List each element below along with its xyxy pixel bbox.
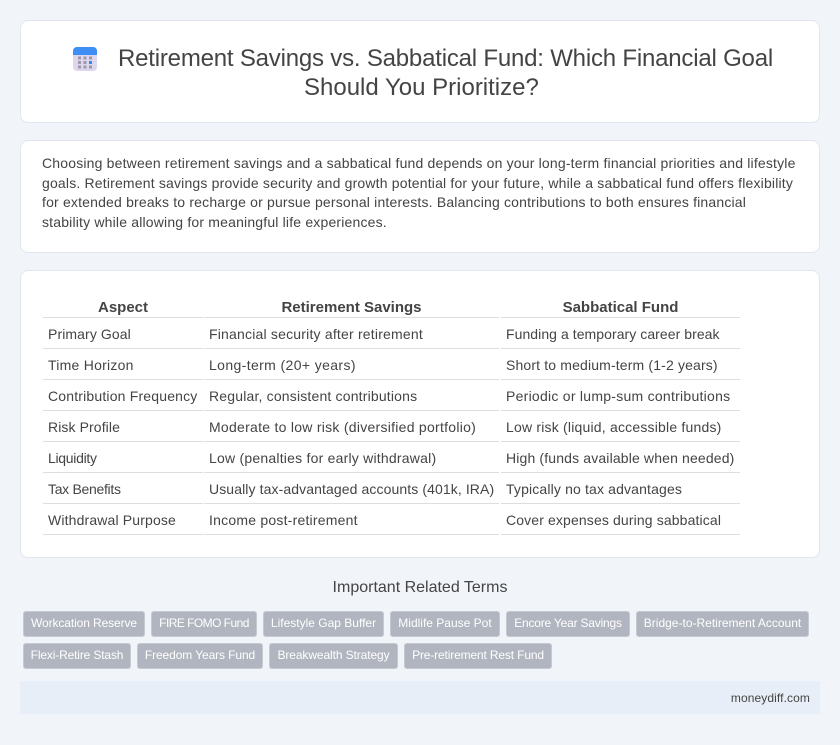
panel: introduction — [20, 140, 820, 253]
row: liquidity: High (funds available when needed) — [506, 450, 734, 466]
row: tax benefits — [43, 481, 740, 504]
tag: Encore Year Savings — [514, 616, 622, 630]
row: tax benefits: Tax Benefits — [48, 481, 121, 497]
tag: Flexi-Retire Stash — [31, 648, 123, 662]
related term tags — [23, 611, 809, 669]
tag — [23, 611, 145, 637]
tag — [263, 611, 384, 637]
row: tax benefits: Usually tax-advantaged accounts (401k, IRA) — [209, 481, 494, 497]
row: contribution frequency: Regular, consistent contributions — [209, 388, 417, 404]
table header — [43, 299, 740, 318]
row: primary goal — [43, 326, 740, 349]
row: liquidity — [43, 450, 740, 473]
tag: Pre-retirement Rest Fund — [412, 648, 544, 662]
tag: FIRE FOMO Fund — [159, 616, 249, 630]
row: risk profile: Risk Profile — [48, 419, 120, 435]
row: tax benefits: Typically no tax advantages — [506, 481, 682, 497]
row: primary goal: Financial security after retirement — [209, 326, 423, 342]
tag: Midlife Pause Pot — [398, 616, 492, 630]
row: withdrawal purpose: Withdrawal Purpose — [48, 512, 176, 528]
row: liquidity: Liquidity — [48, 450, 97, 466]
row: time horizon: Time Horizon — [48, 357, 134, 373]
tag — [390, 611, 500, 637]
tag — [506, 611, 630, 637]
panel: title header — [20, 20, 820, 123]
row: withdrawal purpose: Income post-retirement — [209, 512, 358, 528]
tag — [151, 611, 257, 637]
tag: Freedom Years Fund — [145, 648, 255, 662]
row: liquidity: Low (penalties for early withdrawal) — [209, 450, 436, 466]
tag — [269, 643, 398, 669]
table header: Retirement Savings — [281, 299, 422, 316]
row: primary goal: Primary Goal — [48, 326, 131, 342]
row: time horizon: Short to medium-term (1-2 years) — [506, 357, 718, 373]
title — [118, 45, 773, 101]
tag — [404, 643, 552, 669]
row: risk profile: Low risk (liquid, accessible funds) — [506, 419, 722, 435]
text block: introduction: for extended breaks to recharge or pursue personal interests. Balancing contributions to both ensures financial — [42, 194, 746, 210]
table header: Aspect — [98, 299, 148, 316]
text block: introduction: goals. Retirement savings provide security and growth potential for your future, while a sabbatical fund offers flexibility — [42, 175, 793, 191]
row: contribution frequency — [43, 388, 740, 411]
row: risk profile — [43, 419, 740, 442]
row: time horizon — [43, 357, 740, 380]
row: withdrawal purpose: Cover expenses during sabbatical — [506, 512, 721, 528]
panel: comparison table — [20, 270, 820, 558]
tag: Breakwealth Strategy — [277, 648, 390, 662]
tag — [23, 643, 131, 669]
row: contribution frequency: Periodic or lump-sum contributions — [506, 388, 730, 404]
icon: calendar — [73, 47, 97, 71]
tag: Workcation Reserve — [31, 616, 137, 630]
table header: Sabbatical Fund — [563, 299, 678, 316]
footer source: moneydiff.com — [731, 691, 810, 705]
row: time horizon: Long-term (20+ years) — [209, 357, 356, 373]
row: contribution frequency: Contribution Frequency — [48, 388, 197, 404]
title: Should You Prioritize? — [304, 74, 539, 101]
row: withdrawal purpose — [43, 512, 740, 535]
text block: introduction — [42, 155, 796, 230]
text block: introduction: Choosing between retirement savings and a sabbatical fund depends on your long-term financial priorities and lifestyle — [42, 155, 796, 171]
tag: Lifestyle Gap Buffer — [271, 616, 376, 630]
row: risk profile: Moderate to low risk (diversified portfolio) — [209, 419, 476, 435]
tag — [137, 643, 263, 669]
tag: Bridge-to-Retirement Account — [644, 616, 801, 630]
text block: introduction: stability while allowing for meaningful life experiences. — [42, 214, 387, 230]
heading: related terms: Important Related Terms — [333, 579, 507, 596]
tag — [636, 611, 809, 637]
row: primary goal: Funding a temporary career break — [506, 326, 720, 342]
title: Retirement Savings vs. Sabbatical Fund: Which Financial Goal — [118, 45, 773, 72]
footer — [20, 681, 820, 714]
